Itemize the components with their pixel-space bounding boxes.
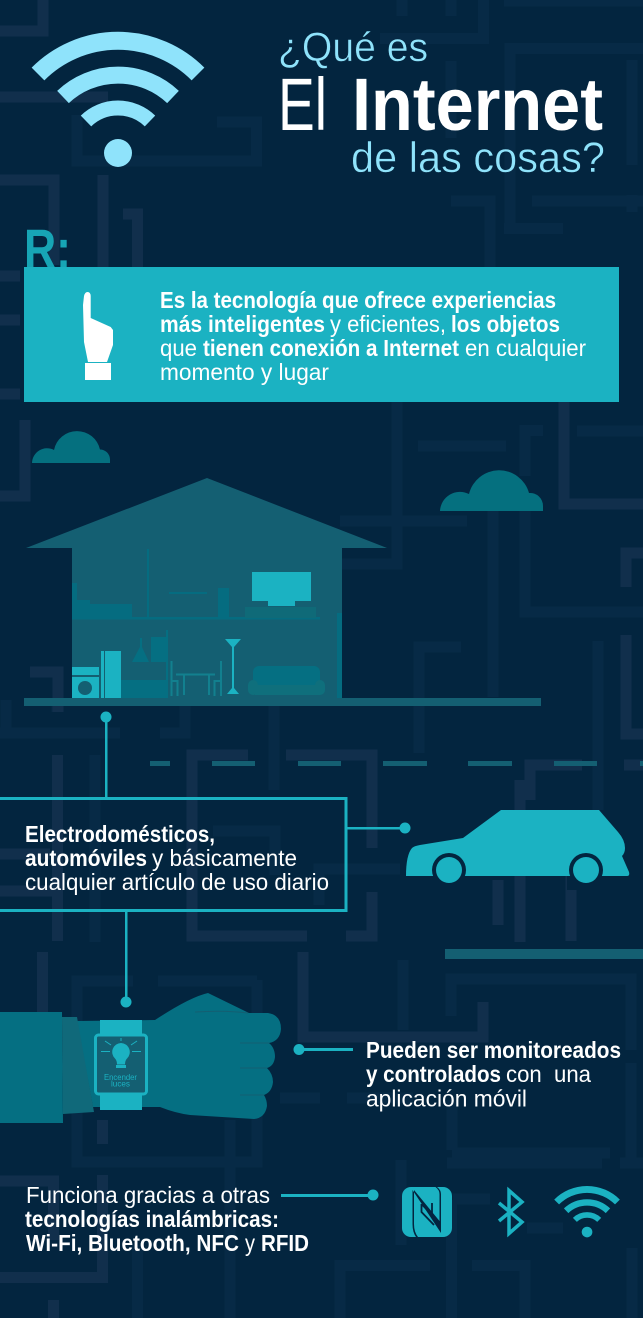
icon: Bluetooth bbox=[499, 1190, 522, 1234]
watch label: Encender bbox=[104, 1072, 137, 1082]
text: wireless technologies: Funciona gracias a otras bbox=[26, 1182, 270, 1208]
connector: house to box bbox=[100, 712, 112, 798]
television bbox=[245, 572, 316, 618]
icon: NFC bbox=[402, 1187, 452, 1237]
text: wireless technologies: tecnologías inalámbricas: bbox=[25, 1206, 279, 1232]
text: objects: cualquier artículo de uso diario bbox=[25, 869, 329, 895]
icon: car bbox=[406, 810, 629, 890]
road strip bbox=[445, 949, 643, 959]
text: wireless technologies: Wi-Fi, Bluetooth, NFC bbox=[26, 1230, 239, 1256]
text: definition: los objetos bbox=[451, 311, 560, 337]
watch label: luces bbox=[111, 1078, 130, 1088]
text: monitored: y controlados bbox=[366, 1061, 501, 1087]
text: definition: más inteligentes bbox=[160, 311, 325, 337]
text: monitored: con una bbox=[506, 1061, 591, 1087]
hand bbox=[77, 993, 281, 1119]
text: objects: Electrodomésticos, bbox=[25, 821, 215, 847]
icon: small wifi signal bbox=[557, 1189, 617, 1237]
kitchen counter and lamp bbox=[121, 630, 168, 698]
watch label bbox=[104, 1072, 137, 1088]
text: wireless technologies: y bbox=[245, 1230, 255, 1256]
text: objects: automóviles bbox=[25, 845, 147, 871]
text: objects bbox=[25, 821, 329, 895]
icon: pointing hand bbox=[83, 292, 113, 380]
kitchen appliances bbox=[72, 651, 121, 698]
panel: definition bbox=[24, 267, 619, 402]
text: objects: y básicamente bbox=[152, 845, 297, 871]
connector: technologies to icons bbox=[281, 1190, 378, 1200]
road dashes bbox=[150, 761, 643, 766]
heading: R: R: bbox=[24, 217, 71, 280]
title: ¿Qué es bbox=[278, 24, 428, 70]
finger creases bbox=[195, 1011, 269, 1095]
connector: box to watch bbox=[120, 911, 132, 1008]
icon: cloud right bbox=[440, 470, 543, 511]
sleeve bbox=[0, 1012, 63, 1123]
illustration: arm and smartwatch bbox=[0, 993, 281, 1123]
connector: box to car bbox=[346, 822, 410, 834]
connector: watch to text bbox=[294, 1044, 353, 1055]
text: definition bbox=[160, 287, 586, 385]
icon: light bulb bbox=[101, 1038, 141, 1068]
ground strip bbox=[24, 698, 541, 706]
text: definition: momento y lugar bbox=[160, 359, 329, 385]
upper floor furniture bbox=[72, 549, 342, 698]
text: monitored: aplicación móvil bbox=[366, 1086, 527, 1112]
text: wireless technologies: RFID bbox=[261, 1230, 309, 1256]
text: monitored: Pueden ser monitoreados bbox=[366, 1037, 621, 1063]
cuff bbox=[62, 1017, 94, 1114]
icon: large wifi signal bbox=[38, 41, 198, 167]
panel: objects callout bbox=[0, 798, 346, 910]
text: definition: que bbox=[160, 335, 197, 361]
title: Internet bbox=[352, 63, 603, 146]
title: de las cosas? bbox=[351, 134, 605, 182]
house structure bbox=[26, 478, 387, 698]
text: definition: tienen conexión a Internet bbox=[203, 335, 459, 361]
sofa bbox=[248, 666, 325, 695]
icon: cloud left bbox=[32, 431, 110, 463]
text: definition: Es la tecnología que ofrece experiencias bbox=[160, 287, 556, 313]
watch bbox=[96, 1020, 146, 1110]
text: monitored bbox=[366, 1037, 621, 1112]
title bbox=[278, 24, 605, 182]
house illustration bbox=[24, 478, 541, 706]
floor lamp bbox=[225, 639, 241, 694]
dining table and chairs bbox=[172, 661, 221, 696]
text: definition: en cualquier bbox=[465, 335, 586, 361]
text: wireless technologies bbox=[25, 1182, 309, 1256]
title: El bbox=[278, 63, 327, 146]
text: definition: y eficientes, bbox=[330, 311, 446, 337]
